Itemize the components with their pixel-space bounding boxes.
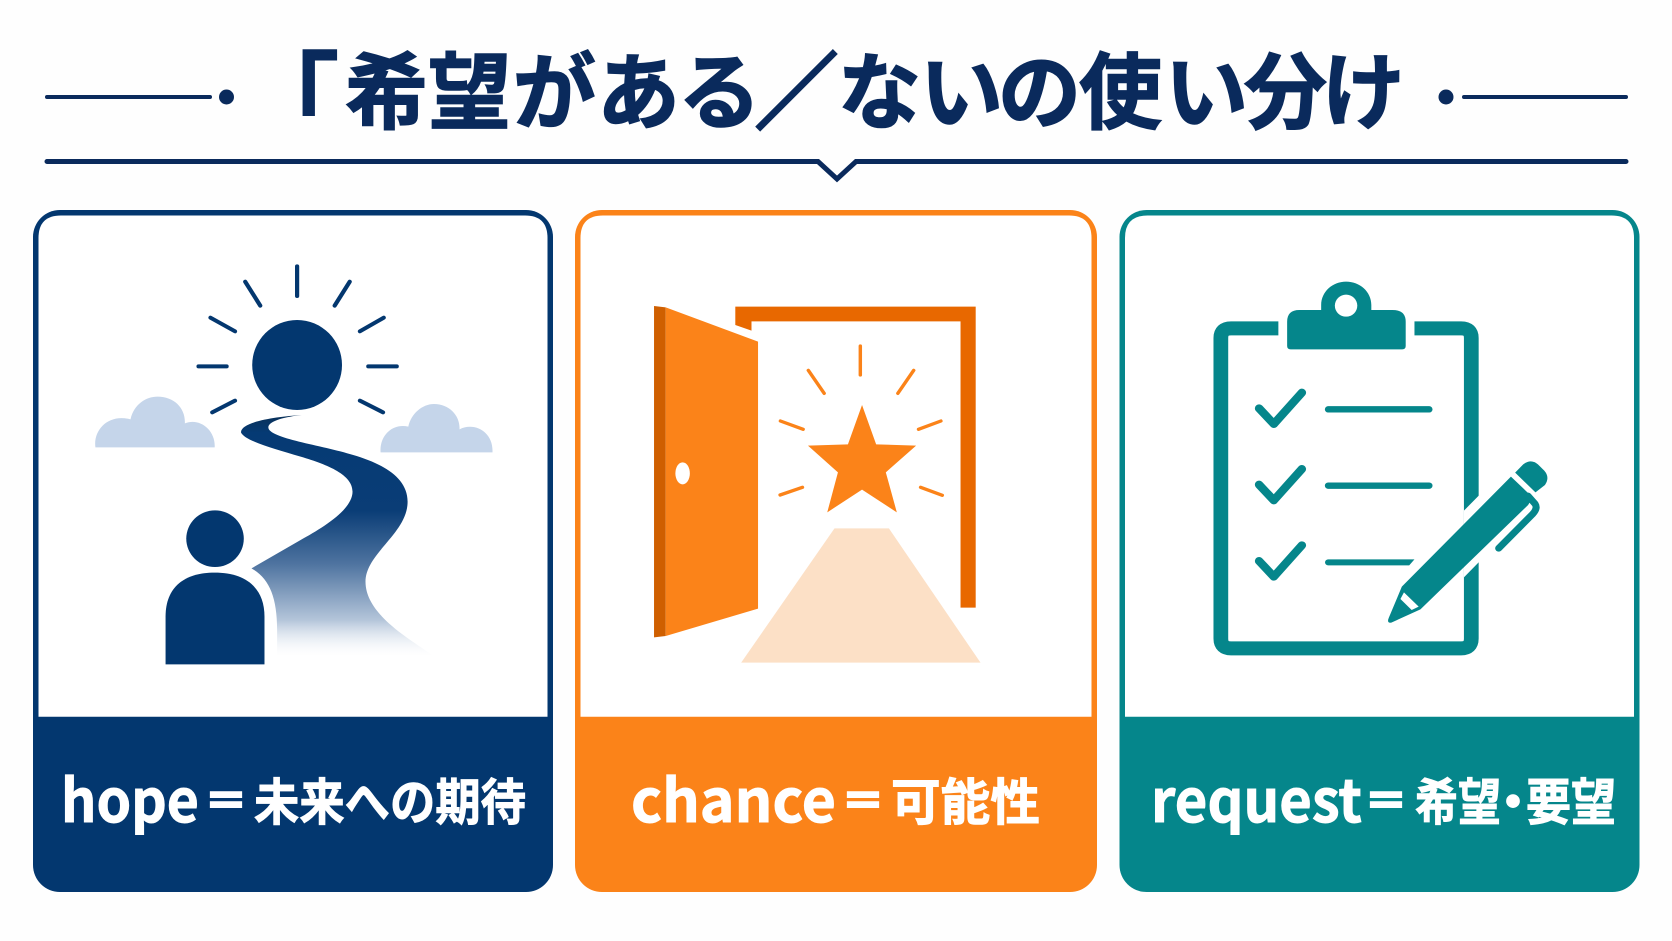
- pen: [1388, 461, 1547, 623]
- panel: request: [1120, 210, 1640, 892]
- header: title with rules: [45, 17, 1628, 179]
- banner label: request: [1151, 754, 1616, 839]
- winding road: [241, 415, 432, 655]
- icon: sun, clouds, road and person: [95, 266, 493, 664]
- clipboard: [1221, 282, 1479, 648]
- panel: hope: [33, 210, 553, 892]
- door frame: [735, 307, 976, 608]
- panel frame and banner: [1120, 210, 1640, 892]
- panel frame and banner: [575, 210, 1097, 892]
- banner label: chance: ＝: [842, 768, 884, 829]
- banner label: chance: chance: [631, 754, 836, 839]
- icon: clipboard and pen: [1221, 282, 1547, 648]
- banner label: hope: [61, 754, 526, 839]
- banner label: request: 希望: [1415, 763, 1501, 835]
- title right ornament: [1438, 90, 1628, 104]
- banner label: hope: hope: [61, 754, 199, 839]
- banner label: hope: ＝: [205, 768, 247, 829]
- cloud right: [380, 404, 493, 452]
- banner label: chance: 可能性: [891, 763, 1040, 835]
- title: 「: [236, 17, 340, 168]
- person: [166, 510, 264, 664]
- banner label: chance: [631, 754, 1040, 839]
- title: 希望がある: [345, 26, 761, 146]
- banner label: request: ・: [1488, 763, 1538, 835]
- light on floor: [741, 528, 981, 663]
- banner label: request: request: [1151, 754, 1362, 839]
- title: ないの使い分け: [838, 26, 1405, 146]
- panel frame and banner: [33, 210, 553, 892]
- title left ornament: [45, 90, 234, 104]
- star with rays: [780, 346, 942, 512]
- checklist: [1259, 393, 1429, 577]
- banner label: request: ＝: [1365, 768, 1407, 829]
- divider with notch: [47, 162, 1626, 179]
- title: ／: [755, 26, 838, 146]
- sun: [199, 266, 397, 412]
- cloud left: [95, 397, 215, 447]
- icon: open door with star: [654, 306, 981, 663]
- banner label: request: 要望: [1526, 763, 1616, 835]
- panel: chance: [575, 210, 1097, 892]
- banner label: hope: 未来への期待: [254, 763, 526, 835]
- door: [654, 306, 758, 637]
